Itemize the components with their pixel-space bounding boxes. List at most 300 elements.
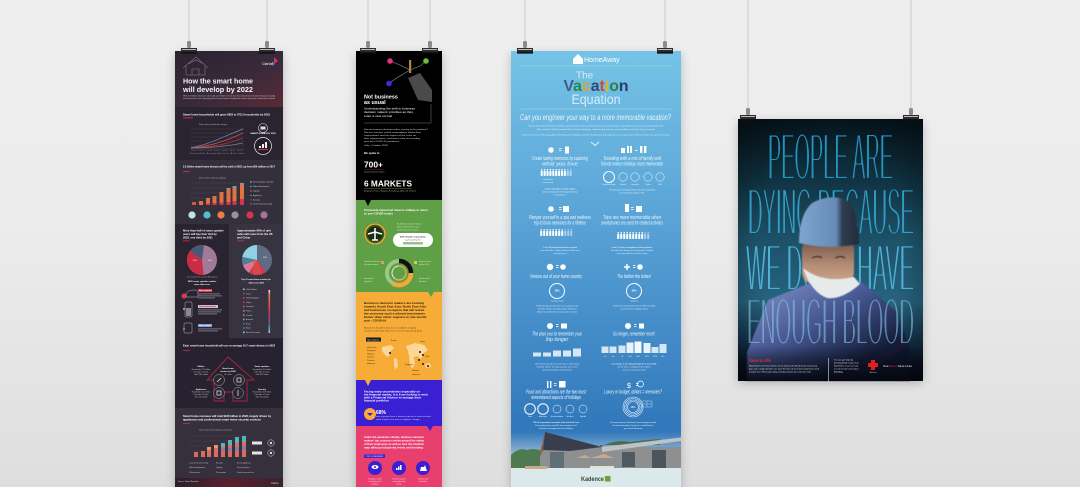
item: phone: Connected devices bbox=[199, 305, 216, 308]
block: longer memories: chance to stay in your mind bbox=[622, 368, 646, 372]
concern text: workplace bbox=[371, 484, 379, 486]
house labels: Total: 61.4 million bbox=[255, 396, 269, 398]
block: longer memories: Go longer, remember more! bbox=[613, 332, 655, 338]
header bbox=[175, 51, 283, 107]
intro text: With 2.5 billion devices to be sold and 700m in revenue the smart home market will grow rapidly bbox=[183, 94, 275, 98]
revenue legend: Smart home services bbox=[237, 471, 254, 474]
revenue legend: Lighting bbox=[216, 466, 222, 469]
stat: we spoke to: We spoke to: bbox=[364, 151, 380, 155]
body: How are business decision-makers reacting to the pandemic? bbox=[364, 128, 429, 131]
block: food and attractions: Attractions bbox=[539, 415, 547, 418]
concern text: Funding and bbox=[418, 478, 428, 480]
block: food and attractions: Food and attractions are the two most bbox=[526, 390, 586, 396]
intro: decision makers' priorities as they bbox=[364, 110, 414, 114]
stat: 68% bbox=[376, 410, 387, 416]
block: food and attractions: attractions and sights from their holidays bbox=[539, 427, 573, 430]
legend: Lighting bbox=[253, 190, 259, 193]
caption bbox=[749, 358, 819, 374]
label and list: Malaysia bbox=[367, 354, 375, 356]
block: spa and wellness: of people say so bbox=[553, 253, 567, 255]
donut notes: by late 2022 bbox=[419, 263, 429, 266]
block: longer memories: trip: for those, a holiday has the highest bbox=[617, 366, 651, 368]
block: spa and wellness bbox=[529, 206, 591, 255]
intro: enter a new normal bbox=[364, 114, 392, 118]
section: households line chart bbox=[175, 107, 283, 160]
revenue legend: Security bbox=[216, 462, 223, 464]
icon: red cross bbox=[868, 360, 878, 374]
body: July - October 2020 bbox=[364, 144, 389, 147]
tagline: Can you engineer your way to a more memorable vacation? bbox=[520, 113, 671, 122]
callout pill: say they will fly less bbox=[405, 238, 421, 242]
block: venture out: People who travel to more than one country on a trip bbox=[536, 304, 578, 308]
label and list bbox=[366, 338, 381, 365]
block: longer memories: 9-10 bbox=[628, 356, 632, 358]
panel: orange: Europe bbox=[391, 340, 397, 342]
body: expectations and the impact of the crisis on bbox=[364, 134, 416, 137]
caption: day, and a single donation can save the lives of up to three patients in need bbox=[749, 368, 819, 370]
call to action: donating blood at your local bbox=[834, 362, 859, 364]
ranking list: Brazil bbox=[246, 328, 251, 330]
icon: house outline bbox=[183, 57, 208, 75]
house labels: Unit sales: 4.1 units bbox=[255, 370, 270, 374]
ranking list: United Kingdom bbox=[246, 297, 259, 300]
concern text: Employee health bbox=[368, 478, 382, 480]
block: family and friends: Friends bbox=[620, 183, 626, 186]
house labels: Unit sales: 3.3 units bbox=[194, 393, 209, 396]
panel: indigo: Facing many uncertainties especially on bbox=[364, 390, 420, 394]
panel: left pie section: 2022 smart speaker models bbox=[188, 280, 217, 283]
panel: orange: Business leaders focus on resilient supply bbox=[364, 326, 416, 330]
block: venture out bbox=[530, 264, 582, 314]
block: further: Long haul bbox=[630, 300, 639, 302]
label and list: Singapore bbox=[367, 349, 376, 352]
section: revenue chart: appliances and professional smart home security services bbox=[183, 418, 261, 422]
body: post the COVID-19 pandemic. bbox=[364, 140, 401, 143]
panel: orange: faster than other regions in the world bbox=[364, 315, 426, 319]
house labels: 16.7 units bbox=[224, 373, 232, 376]
concern text: cash flow bbox=[419, 481, 427, 483]
block: family and friends: Immediate family bbox=[603, 183, 616, 186]
revenue legend: Thermostats bbox=[216, 471, 226, 474]
block: capture moments: what you love bbox=[542, 162, 578, 168]
block: plan longer: trip longer bbox=[546, 337, 569, 343]
line chart bbox=[190, 129, 245, 148]
block: budget: Luxury or budget, dollars = memories? bbox=[604, 390, 662, 396]
block: venture out: Overseas travel bbox=[551, 300, 564, 302]
block: family and friends: for memorable holidays: 57% bbox=[620, 192, 645, 194]
title: Vacation bbox=[564, 78, 628, 95]
panel: green: to pre-COVID levels bbox=[364, 212, 393, 216]
icon: coin bbox=[364, 408, 376, 420]
stacked bars bbox=[190, 183, 245, 205]
block: further: 30% bbox=[632, 290, 637, 292]
ranking list bbox=[243, 288, 259, 334]
stat: markets: 6 MARKETS bbox=[364, 180, 413, 188]
house labels: Households: 12.2 million bbox=[192, 392, 210, 394]
block: spa and wellness: more often than a holiday elsewhere: 100% more bbox=[540, 249, 580, 252]
pie chart: 35% bbox=[193, 260, 197, 262]
panel: left pie section: Yes, no plans Yes, next year Already own bbox=[187, 276, 217, 278]
label and list: Thailand bbox=[367, 360, 374, 362]
section: bar chart of device sales: 2.5 billion smart home devices will be sold in 2022, up from 850 million in 2017 bbox=[183, 164, 275, 168]
section: revenue chart: Total revenue by category and device bbox=[199, 428, 233, 432]
label and list: Indonesia bbox=[367, 363, 376, 365]
panel: right pie section: sales will come from the US bbox=[237, 232, 273, 236]
block: food and attractions: Activities bbox=[567, 415, 573, 418]
title: The bbox=[576, 70, 594, 82]
block: venture out: Venture out of your home country bbox=[530, 274, 582, 280]
panel: left pie section: 2022, one third by 2021 bbox=[183, 236, 213, 240]
footer: Clarion bbox=[271, 482, 279, 485]
section: households line chart: Smart home households will grow 2803 to 572.5 households by 2022 bbox=[183, 112, 270, 116]
panel: indigo: and expect to see a higher usage bbox=[376, 418, 420, 421]
block: plan longer: remember it better: the longer you plan, up to 31.1% bbox=[536, 366, 578, 368]
block: smartphones bbox=[601, 204, 663, 255]
ranking gradient bar bbox=[268, 290, 270, 333]
block: plan longer bbox=[532, 323, 582, 372]
poster 3: the vacation equation bbox=[511, 51, 681, 487]
block: family and friends: Traveling with a mix of family and bbox=[603, 156, 661, 162]
house icons bbox=[214, 374, 244, 398]
title: How the smart home bbox=[183, 76, 253, 86]
block: further: People who travel far from home are 30% more likely bbox=[613, 304, 655, 308]
legend bbox=[250, 181, 274, 206]
legend: Video entertainment bbox=[253, 185, 270, 188]
ranking list: United States bbox=[246, 288, 257, 291]
block: budget bbox=[604, 381, 662, 430]
panel: indigo: with a Financial Advisor to manage their bbox=[363, 396, 422, 400]
block: budget: The most expensive trip doesn't necessarily get ranked bbox=[610, 421, 656, 424]
body bbox=[364, 128, 429, 147]
block: longer memories: 15-21 bbox=[645, 356, 649, 358]
ranking list: Germany bbox=[246, 306, 253, 308]
intro: We all know the benefits of taking a break from work but does how we spend it make a real difference to how memorable it is? bbox=[528, 124, 664, 128]
block: family and friends bbox=[601, 146, 664, 194]
caption: Save a Life bbox=[749, 358, 772, 363]
ranking list: France bbox=[246, 310, 252, 312]
block: longer memories: 4-6 bbox=[612, 356, 614, 358]
footer: Source: Clarion Research bbox=[178, 481, 199, 483]
block: venture out: likely to be recalled when travel abroad is involved bbox=[537, 310, 577, 314]
panel: orange: the economy such a vibrant investments bbox=[364, 312, 425, 316]
item: car: Most reported bbox=[199, 289, 212, 292]
block: budget: 28% bbox=[631, 406, 636, 409]
ranking list: Japan bbox=[246, 302, 251, 304]
section: bar chart of device sales: Smart home sales by category bbox=[199, 176, 226, 180]
block: food and attractions: Accommodation bbox=[551, 415, 563, 418]
block: further: to remember their holidays overall bbox=[620, 308, 648, 310]
stat: households: SMART HOMES BY 2022 bbox=[250, 132, 277, 135]
ranking list: Rest of the world bbox=[246, 331, 259, 334]
pie chart: 55% bbox=[208, 260, 212, 262]
block: longer memories: 7-8 bbox=[621, 356, 623, 358]
poster 2: not business as usual: business decision makers bbox=[364, 172, 385, 174]
label: TOP 3 CONCERNS bbox=[366, 456, 384, 458]
block: smartphones: smartphones are used for related activities bbox=[601, 220, 663, 226]
house labels: Unit sales: 3.1 units bbox=[255, 393, 270, 396]
block: longer memories: 11-14 bbox=[636, 356, 640, 358]
revenue legend: Smart appliances bbox=[237, 462, 251, 464]
network icon bbox=[386, 58, 432, 102]
pie chart bbox=[187, 245, 217, 275]
block: capture moments: taken on holiday one of their top 100% ideas bbox=[542, 190, 578, 194]
house labels: Total: 195.5 million bbox=[194, 373, 208, 376]
panel: orange: Malaysia bbox=[412, 370, 419, 372]
ranking list: China bbox=[246, 293, 251, 295]
house labels: Security bbox=[258, 388, 267, 391]
panel: right pie section: Top 10 smart home markets (in bbox=[241, 278, 271, 281]
stacked revenue bars bbox=[190, 436, 249, 457]
donut notes bbox=[364, 260, 432, 283]
poster 1: smart home bbox=[175, 51, 283, 487]
panel: pink: may affect productivity levels and funding bbox=[364, 446, 423, 450]
donut chart bbox=[387, 261, 411, 285]
block: capture moments: Take photos bbox=[543, 178, 553, 181]
category circles bbox=[188, 211, 268, 219]
icon: red cross: Red Cross bbox=[869, 371, 877, 374]
text: business decision makers bbox=[397, 228, 419, 232]
block: food and attractions: Food bbox=[528, 416, 532, 418]
house labels: Total: 40.4 million bbox=[194, 396, 208, 398]
gown shadow at bottom bbox=[738, 345, 923, 381]
block: budget: the most memorable, though it is a small factor in bbox=[612, 424, 654, 427]
intro bbox=[522, 124, 670, 136]
ranking list: Canada bbox=[246, 315, 252, 317]
block: capture moments bbox=[532, 146, 588, 196]
panel: left pie section: more than ever bbox=[194, 283, 210, 286]
panel: right pie section: Approximately 90% of unit bbox=[237, 228, 271, 232]
block: further: The farther the better! bbox=[617, 274, 651, 280]
logo bbox=[573, 54, 620, 64]
block: plan longer: The plan you to remember your bbox=[532, 332, 582, 338]
heading: Not business bbox=[364, 94, 398, 100]
title: Equation bbox=[572, 92, 620, 107]
block: family and friends: Partner bbox=[645, 183, 651, 186]
photo: villa and pool bbox=[511, 432, 681, 487]
callout pill: 60% of Asian respondents bbox=[400, 236, 427, 238]
world map bbox=[382, 343, 431, 370]
block: capture moments: Create lasting memories by capturing bbox=[532, 156, 588, 162]
divider bbox=[827, 358, 830, 382]
pie chart: 43% bbox=[263, 257, 267, 259]
poster 4: people are dying bbox=[738, 119, 923, 382]
block: longer memories: 29+ bbox=[662, 356, 664, 358]
body: their organisations, and where they are heading bbox=[364, 137, 420, 140]
house labels: Households: 15.4 million bbox=[253, 369, 271, 371]
block: spa and wellness: trip to book memories for a lifetime bbox=[534, 220, 586, 226]
concern text: Business growth bbox=[392, 478, 406, 480]
concern text: and safety in the bbox=[368, 480, 382, 483]
ranking list: Australia bbox=[246, 318, 253, 321]
stat: markets bbox=[364, 180, 416, 192]
intro bbox=[364, 106, 416, 118]
block: budget: your overall memories bbox=[624, 427, 642, 430]
logo: Kadence: Kadence bbox=[581, 477, 605, 483]
panel: orange: Japan bbox=[420, 341, 425, 343]
donut notes: Mixed outlook bbox=[419, 277, 430, 280]
section: households line chart: Smart home growth by category bbox=[199, 123, 227, 126]
donut notes: for others bbox=[419, 280, 427, 283]
ranking list: Korea bbox=[246, 323, 251, 325]
house labels: Smart home bbox=[222, 367, 235, 370]
footer bbox=[175, 478, 283, 487]
block: spa and wellness: Pamper yourself in a spa and wellness bbox=[529, 215, 591, 221]
poster 2: not business as usual bbox=[356, 51, 442, 487]
block: spa and wellness: 1 out of 5 people remember a spa break bbox=[543, 246, 577, 249]
block: plan longer: of those planning five months ahead bbox=[543, 368, 571, 372]
house outline bbox=[207, 357, 254, 401]
block: venture out: remember it better: the holiday will be 100% more bbox=[537, 308, 577, 310]
panel: orange: Singapore bbox=[405, 364, 413, 366]
figure: head bbox=[799, 197, 860, 298]
hanging strings bbox=[189, 0, 911, 108]
donut notes: Domestic short-haul bbox=[364, 260, 381, 263]
section: revenue chart bbox=[175, 408, 283, 478]
block: smartphones: more memorable for up to 32% of trips bbox=[617, 252, 647, 255]
block: food and attractions: 73% of respondents remember food and drink more bbox=[533, 421, 579, 424]
slogan: One Blood Save Lives bbox=[883, 364, 913, 368]
house labels bbox=[192, 365, 271, 398]
block: smartphones: 6 out of 10 use a smartphone to look up places, bbox=[612, 246, 653, 249]
block: food and attractions bbox=[525, 381, 587, 430]
panel: pink bbox=[356, 426, 442, 487]
block: family and friends: Solo bbox=[658, 184, 662, 186]
concern icons bbox=[368, 461, 430, 475]
section: revenue chart: Smart home revenues will total $180 billion in 2022, largely driven by bbox=[183, 414, 271, 418]
body: Recent surveys asked respondents about their bbox=[364, 131, 421, 134]
donut notes: International bbox=[364, 277, 374, 280]
call to action: our site to learn more about bbox=[834, 368, 859, 370]
text bbox=[397, 222, 421, 232]
panel: orange: post - COVID-19 bbox=[364, 318, 386, 322]
caption: of urgent care. Please give today and help someone you may never meet bbox=[749, 370, 811, 374]
revenue legend: Smart speakers bbox=[237, 466, 250, 469]
poster 2: not business as usual: 700+ bbox=[364, 160, 383, 170]
section: bar chart of device sales bbox=[175, 160, 283, 224]
block: family and friends: friends makes holidays more memorable bbox=[601, 162, 663, 168]
panel: right pie section bbox=[229, 224, 283, 338]
block: capture moments: to remember it bbox=[554, 194, 566, 196]
panel: right pie section: and China bbox=[237, 236, 250, 240]
panel: pink: Under the pandemic climate, business decision bbox=[364, 435, 424, 439]
call to action: blood bank, or you can visit bbox=[834, 364, 859, 368]
block: food and attractions: Nightlife bbox=[580, 415, 586, 418]
house labels: Smart speakers bbox=[255, 365, 270, 368]
panel: pink: makers' top concerns evolve around the safety bbox=[364, 438, 424, 442]
block: longer memories: 22-28 bbox=[653, 356, 657, 358]
callout pill bbox=[393, 233, 433, 247]
text: below 2019 levels for most bbox=[397, 226, 420, 228]
block: plan longer: 20% of those who plan a trip more than a month ahead bbox=[535, 362, 579, 366]
revenue callouts bbox=[252, 440, 274, 456]
headline: top lines bbox=[746, 119, 914, 306]
intro: Understanding the shift in business bbox=[364, 106, 416, 110]
panel: indigo bbox=[356, 380, 442, 427]
section: households line chart: Households Europe Americas Asia Other bbox=[190, 152, 245, 155]
map markers bbox=[389, 351, 429, 367]
house labels: devices by 2022 bbox=[220, 371, 237, 373]
panel: indigo: rate of people have a financial adviser in some markets bbox=[376, 415, 431, 418]
panel: green: Previously-impressed travel is unlikely to return bbox=[364, 208, 428, 212]
house labels: Utilities bbox=[197, 365, 205, 368]
header: will develop by 2022 bbox=[182, 85, 253, 94]
panel: indigo: the financial market, it is II are looking to work bbox=[364, 392, 428, 396]
text: By 2022 air travel will remain bbox=[397, 222, 421, 226]
logo: Clarion bbox=[262, 62, 273, 66]
block: longer memories: 1-3 bbox=[604, 356, 606, 358]
legend: Control and connectivity bbox=[253, 203, 272, 206]
legend: Smart speakers and hubs bbox=[253, 181, 274, 184]
house labels: Households: 67.2 million bbox=[192, 369, 210, 371]
caption: Blood banks need more donors as the demand for blood keeps rising every bbox=[749, 364, 817, 368]
revenue legend: Control and connectivity bbox=[189, 462, 208, 464]
intro: Here are some of the equations behind great holidays and the things that will add up to a vacation you will remember for years to come bbox=[522, 134, 670, 136]
donut notes: long-haul bbox=[364, 281, 372, 283]
block: longer memories bbox=[602, 323, 666, 372]
panel: orange bbox=[356, 292, 442, 381]
panel: left pie section bbox=[175, 224, 229, 338]
panel: left pie section: users will buy their 2nd by bbox=[183, 232, 217, 236]
binder clips bbox=[181, 41, 919, 121]
panel: orange: Business decision makers are looking bbox=[364, 301, 424, 305]
label and list: Vietnam bbox=[367, 356, 374, 358]
call to action: donating. bbox=[834, 370, 843, 374]
panel: pink: of their employees as well as how the situation bbox=[364, 442, 424, 446]
call to action bbox=[834, 360, 859, 374]
figure: gown bbox=[747, 283, 910, 381]
block: food and attractions: remembered aspects of holidays bbox=[531, 395, 581, 401]
chevron bbox=[591, 142, 599, 146]
block: longer memories: 8 to 14 days is the optimal length for a memorable bbox=[612, 362, 656, 366]
donut notes: Regional travel bbox=[419, 260, 432, 263]
concern text: levels bbox=[397, 484, 401, 486]
stat: markets: Singapore, France, Malaysia, Hong Kong, Japan, UK, Vietnam bbox=[364, 190, 416, 192]
donut notes: will return soonest bbox=[364, 263, 379, 266]
panel: orange: chains and trade links that connect growing Asia bbox=[364, 330, 423, 332]
block: smartphones: plan and check things, and say this makes a holiday bbox=[611, 249, 653, 252]
revenue legend bbox=[189, 462, 254, 474]
call to action: You can give hope by bbox=[834, 360, 853, 362]
legend: Appliances bbox=[253, 194, 262, 197]
section: house devices: Each smart home household will use on average 16.7 smart devices in 2022 bbox=[183, 344, 275, 348]
panel: indigo: financial portfolios bbox=[364, 398, 389, 402]
section: house devices bbox=[175, 338, 283, 408]
panel: orange: China bbox=[425, 356, 430, 358]
block: budget: $ bbox=[627, 383, 631, 390]
revenue legend: Video entertainment bbox=[189, 466, 206, 469]
block: food and attractions: than anything else, and 64% also remember local bbox=[535, 424, 577, 427]
poster 2: not business as usual: as usual bbox=[364, 100, 386, 106]
block: venture out: 30% bbox=[555, 290, 560, 292]
panel: left pie section: More than half of smart speaker bbox=[183, 228, 224, 232]
panel: green bbox=[356, 200, 442, 293]
panel: orange: Indonesia bbox=[412, 374, 420, 376]
house labels: Appliances bbox=[196, 388, 207, 391]
item: tablet: Home control bbox=[199, 324, 212, 327]
legend: Security bbox=[253, 199, 260, 202]
revenue legend: Other devices bbox=[189, 471, 200, 474]
house labels: Households: 19.8 million bbox=[253, 392, 271, 394]
block: family and friends: Extended bbox=[631, 183, 639, 186]
section: households line chart: 2016 2017 2018 2019 2020 2021 2022 bbox=[191, 150, 243, 152]
intro: We asked 1,000 people about their holidays, what makes them memorable and how they choose bbox=[537, 128, 656, 131]
panel: orange: and businesses on regions that will restart bbox=[364, 308, 424, 312]
concern text bbox=[368, 478, 428, 486]
house labels: Unit sales: 2.9 units bbox=[194, 370, 209, 374]
block: family and friends: Travelling with immediate family is the best combination bbox=[609, 188, 655, 192]
panel: right pie section: millions) in 2022 bbox=[248, 282, 265, 284]
label and list: Hong Kong bbox=[367, 347, 376, 349]
